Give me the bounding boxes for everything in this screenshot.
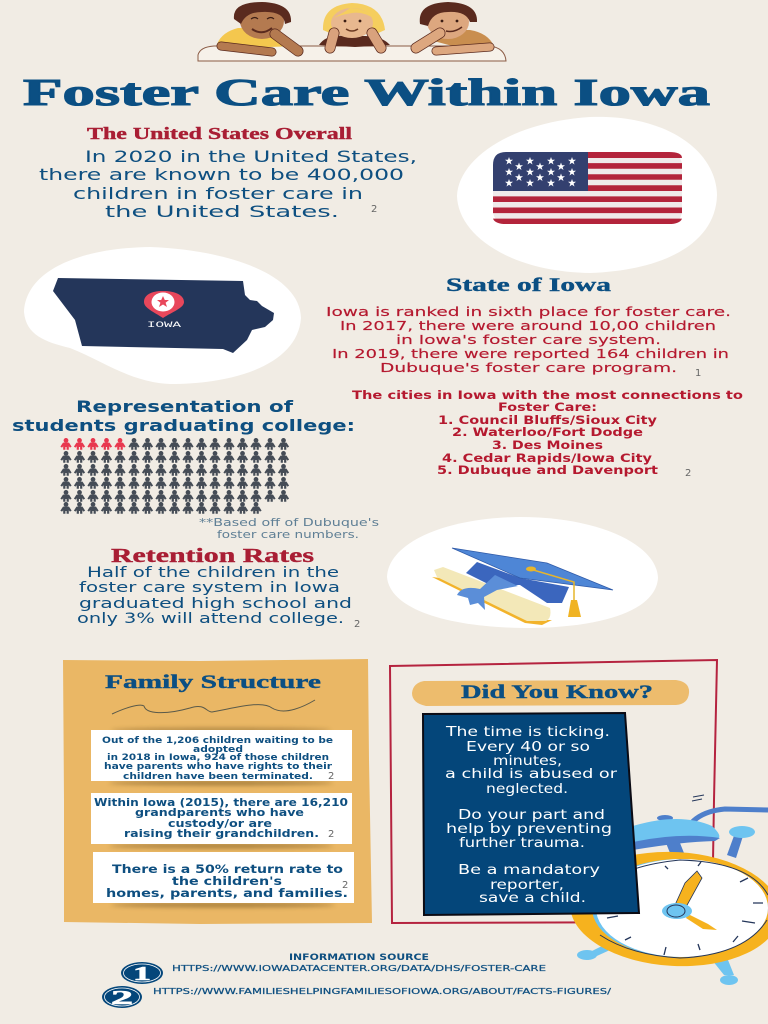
card: grandparents: raising their grandchildren. <box>124 828 319 840</box>
card: grandparents <box>91 793 352 844</box>
text block: United States figures: the United States. <box>105 202 339 221</box>
heading: The United States Overall: The United States Overall <box>87 124 352 143</box>
heading: Representation of students graduating college <box>12 397 355 435</box>
child middle <box>319 3 390 48</box>
callout: time is ticking: a child is abused or <box>445 766 618 782</box>
text block: United States figures: In 2020 in the United States, <box>85 147 417 166</box>
text block: cities with most connections: 4. Cedar Rapids/Iowa City <box>442 451 653 465</box>
text block: Iowa foster care ranking: In 2019, there were reported 164 children in <box>332 346 729 361</box>
panel: did you know <box>390 660 717 923</box>
text block: cities with most connections: 1. Council Bluffs/Sioux City <box>438 413 658 427</box>
source 1 <box>121 962 546 985</box>
callout: time is ticking: Be a mandatory <box>458 862 600 878</box>
footnote: based off of Dubuque's numbers <box>199 517 379 541</box>
card: adoption figures: children have been terminated. <box>123 772 313 782</box>
text block: retention rates: foster care system in Iowa <box>79 580 340 596</box>
icon: United States flag on white blob <box>457 117 717 273</box>
badge: 1: 1 <box>133 963 151 985</box>
heading pill: Did You Know?: Did You Know? <box>461 682 653 703</box>
heading: State of Iowa: State of Iowa <box>446 275 612 296</box>
text block: cities with most connections: 5. Dubuque and Davenport <box>437 463 659 477</box>
callout: time is ticking <box>423 713 639 915</box>
callout: time is ticking: save a child. <box>479 890 586 906</box>
title: Foster Care Within Iowa <box>23 72 710 114</box>
callout: time is ticking: further trauma. <box>459 835 585 851</box>
heading: Representation of students graduating college: students graduating college: <box>12 416 355 435</box>
card: adoption figures: have parents who have rights to their <box>104 762 333 772</box>
callout: time is ticking: reporter, <box>490 877 564 893</box>
child right <box>416 2 494 51</box>
panel: family structure <box>63 659 372 924</box>
text block: Iowa foster care ranking: In 2017, there were around 10,00 children <box>340 318 716 333</box>
map: Iowa on white blob: IOWA <box>147 321 181 330</box>
heading: Retention Rates: Retention Rates <box>111 545 314 567</box>
callout: time is ticking: minutes, <box>493 753 562 769</box>
text block: United States figures: 2 <box>371 204 377 215</box>
text block: Iowa foster care ranking: Dubuque's foster care program. <box>380 360 677 375</box>
badge: 1 <box>121 962 163 985</box>
card: return rate: There is a 50% return rate to <box>112 862 343 876</box>
text block: retention rates: Half of the children in the <box>87 565 339 581</box>
footnote: based off of Dubuque's numbers: **Based off of Dubuque's <box>199 517 379 529</box>
text block: United States figures: children in foster care in <box>73 184 363 203</box>
text block: cities with most connections: 2. Waterloo/Fort Dodge <box>452 425 643 439</box>
text block: cities with most connections: The cities in Iowa with the most connections to <box>352 388 743 402</box>
card: adoption figures <box>91 730 352 782</box>
text block: United States figures <box>39 147 417 221</box>
desk <box>198 46 506 61</box>
callout: time is ticking: The time is ticking. <box>445 724 610 740</box>
card: grandparents: custody/or are <box>168 818 272 830</box>
heading pill: Did You Know? <box>412 680 689 706</box>
text block: retention rates: only 3% will attend college. <box>77 611 344 627</box>
card: adoption figures: adopted <box>193 745 243 755</box>
icon: map pin <box>144 291 184 318</box>
card: adoption figures: 2 <box>328 771 334 782</box>
text block: Iowa foster care ranking: 1 <box>695 368 701 379</box>
map: Iowa on white blob <box>24 247 301 384</box>
text block: retention rates <box>77 565 360 630</box>
text block: cities with most connections: Foster Care: <box>498 400 597 414</box>
card: return rate: the children's <box>172 874 282 888</box>
card: return rate: homes, parents, and families. <box>106 886 348 900</box>
source 1: HTTPS://WWW.IOWADATACENTER.ORG/DATA/DHS/FOSTER-CARE <box>172 964 546 973</box>
source 2: HTTPS://WWW.FAMILIESHELPINGFAMILIESOFIOWA.ORG/ABOUT/FACTS-FIGURES/ <box>153 987 612 996</box>
heading: information source: INFORMATION SOURCE <box>289 953 429 963</box>
text block: United States figures: there are known to be 400,000 <box>39 165 404 184</box>
text block: retention rates: 2 <box>354 619 360 630</box>
badge: 2 <box>102 986 142 1009</box>
pictogram: students graduating <box>60 438 289 514</box>
icon: graduation cap and diploma on white blob <box>387 517 658 628</box>
callout: time is ticking: Do your part and <box>458 807 605 823</box>
heading: Representation of students graduating college: Representation of <box>76 397 294 416</box>
child left <box>217 2 298 52</box>
badge: 2: 2 <box>111 987 133 1009</box>
card: return rate: 2 <box>342 880 348 891</box>
text block: Iowa foster care ranking: in Iowa's foster care system. <box>396 332 661 347</box>
footnote: based off of Dubuque's numbers: foster care numbers. <box>217 529 359 541</box>
text block: Iowa foster care ranking <box>326 304 731 379</box>
source 2 <box>102 986 612 1009</box>
callout: time is ticking: neglected. <box>486 781 568 797</box>
text block: cities with most connections: 3. Des Moines <box>492 438 603 452</box>
card: grandparents: 2 <box>328 829 334 840</box>
text block: Iowa foster care ranking: Iowa is ranked in sixth place for foster care. <box>326 304 731 319</box>
card: grandparents: grandparents who have <box>135 807 304 819</box>
card: grandparents: Within Iowa (2015), there are 16,210 <box>94 797 348 809</box>
card: adoption figures: Out of the 1,206 children waiting to be <box>102 736 333 746</box>
text block: cities with most connections: 2 <box>685 468 691 479</box>
callout: time is ticking: help by preventing <box>446 821 612 837</box>
card: adoption figures: in 2018 in Iowa, 924 of those children <box>107 753 329 763</box>
text block: cities with most connections <box>352 388 743 479</box>
text block: retention rates: graduated high school and <box>79 596 352 612</box>
callout: time is ticking: Every 40 or so <box>466 739 590 755</box>
card: return rate <box>93 852 354 903</box>
heading: Family Structure: Family Structure <box>105 672 321 693</box>
illustration: three children at a desk <box>198 2 506 61</box>
icon: alarm clock <box>567 795 768 985</box>
